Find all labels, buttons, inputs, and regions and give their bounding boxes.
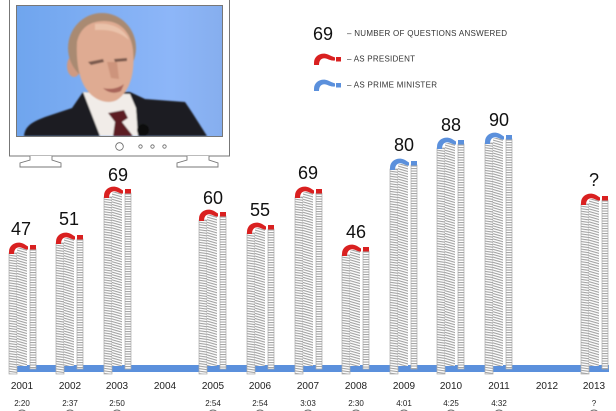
durations: 2:37 xyxy=(62,399,78,408)
monitor buttons xyxy=(116,143,166,150)
bar 2002 xyxy=(56,233,83,374)
bar 2011 xyxy=(485,133,512,374)
value 47: 47 xyxy=(11,219,31,239)
legend: number of questions xyxy=(313,24,507,44)
year labels: 2003 xyxy=(106,381,129,392)
durations: 4:32 xyxy=(491,399,507,408)
year labels: 2009 xyxy=(393,381,416,392)
value unknown: ? xyxy=(589,170,599,190)
bar 2005 xyxy=(199,210,226,374)
legend: as prime minister xyxy=(314,80,437,91)
baseline xyxy=(9,365,609,372)
bar 2003 xyxy=(104,187,131,374)
bar 2001 xyxy=(9,243,36,374)
durations: 2:54 xyxy=(205,399,221,408)
legend xyxy=(313,24,507,91)
year labels: 2004 xyxy=(154,381,177,392)
value 69: 69 xyxy=(298,163,318,183)
year labels: 2002 xyxy=(59,381,82,392)
bar 2007 xyxy=(295,187,322,374)
bar 2009 xyxy=(390,159,417,374)
legend: as president xyxy=(314,54,415,65)
durations: 2:54 xyxy=(252,399,268,408)
durations: 2:20 xyxy=(14,399,30,408)
durations: 2:50 xyxy=(109,399,125,408)
year labels: 2011 xyxy=(488,381,510,392)
value 69: 69 xyxy=(108,165,128,185)
value 55: 55 xyxy=(250,200,270,220)
bar 2013 xyxy=(581,194,608,374)
year labels: 2012 xyxy=(536,381,559,392)
year labels: 2008 xyxy=(345,381,368,392)
durations: 2:30 xyxy=(348,399,364,408)
year labels xyxy=(11,381,606,392)
bar 2010 xyxy=(437,138,464,374)
value 60: 60 xyxy=(203,188,223,208)
monitor stand feet xyxy=(20,156,218,167)
bar 2008 xyxy=(342,245,369,374)
clock icons cut off at the bottom edge xyxy=(17,410,599,411)
legend: as prime minister: – AS PRIME MINISTER xyxy=(347,80,437,90)
photo: portrait on blue backdrop xyxy=(17,6,223,136)
value 46: 46 xyxy=(346,222,366,242)
bar 2006 xyxy=(247,223,274,374)
year labels: 2013 xyxy=(583,381,606,392)
durations xyxy=(14,399,597,408)
year labels: 2007 xyxy=(297,381,320,392)
value 51: 51 xyxy=(59,209,79,229)
value 80: 80 xyxy=(394,135,414,155)
legend: number of questions: – NUMBER OF QUESTIONS ANSWERED xyxy=(347,29,507,38)
durations: 4:25 xyxy=(443,399,459,408)
year labels: 2005 xyxy=(202,381,225,392)
durations: 4:01 xyxy=(396,399,412,408)
year labels: 2010 xyxy=(440,381,463,392)
value 88: 88 xyxy=(441,115,461,135)
year labels: 2001 xyxy=(11,381,34,392)
legend: number of questions: 69 xyxy=(313,24,333,44)
value 90: 90 xyxy=(489,110,509,130)
year labels: 2006 xyxy=(249,381,272,392)
durations: ? xyxy=(592,399,597,408)
legend: as president: – AS PRESIDENT xyxy=(347,54,415,64)
monitor xyxy=(10,0,230,167)
durations: 3:03 xyxy=(300,399,316,408)
